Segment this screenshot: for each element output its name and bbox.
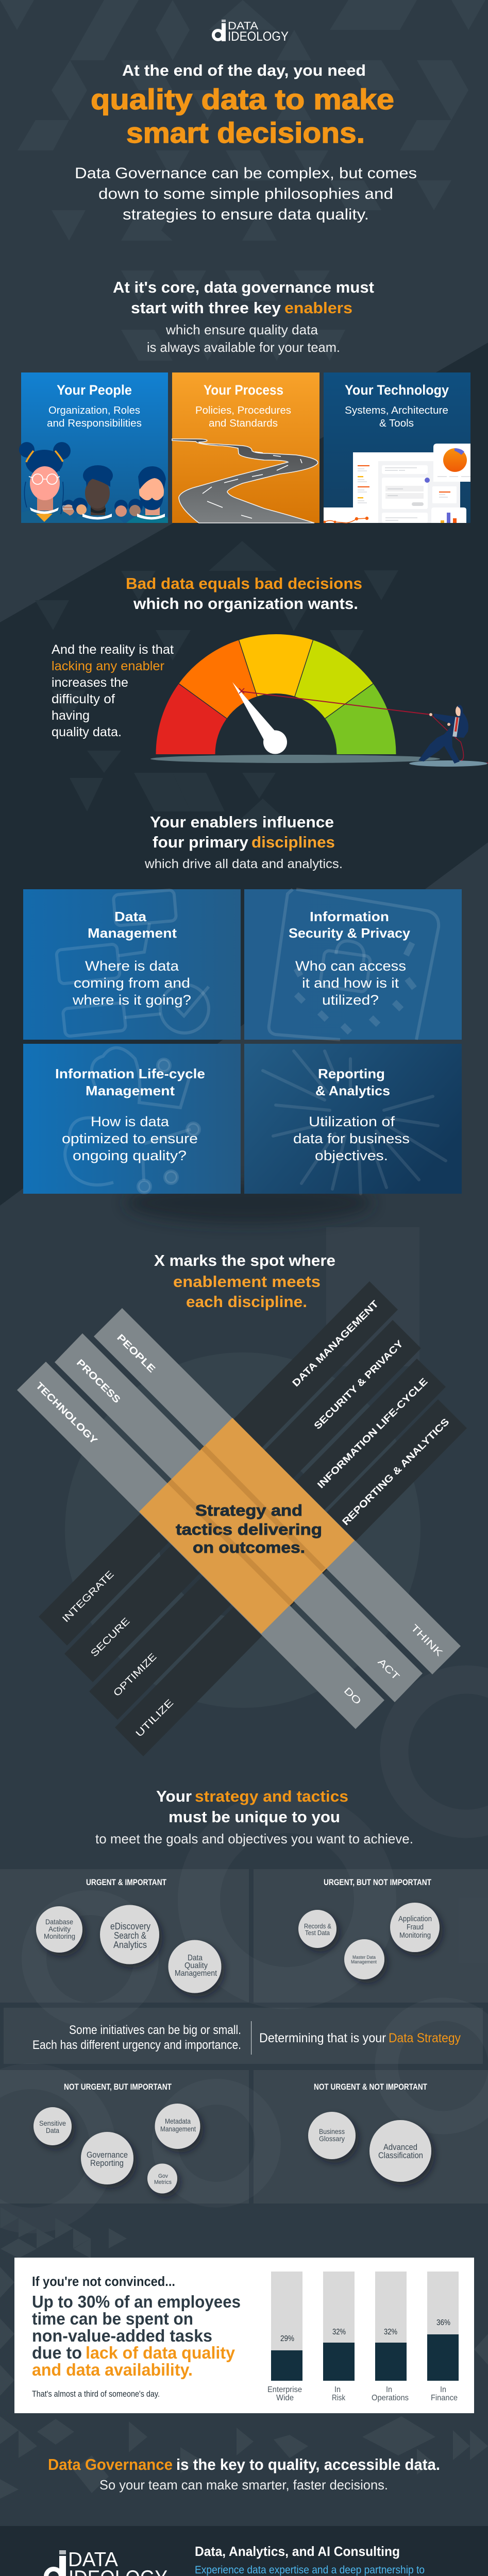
panel: reporting and analytics: Reporting	[318, 1066, 385, 1081]
bar chart: In	[386, 2385, 392, 2394]
text block: reality of lacking enablers: having	[52, 708, 90, 723]
label: enabler stripes: TECHNOLOGY	[33, 1380, 99, 1447]
heading: x marks the spot: X marks the spot where	[154, 1251, 335, 1269]
text block: reality of lacking enablers: increases the	[52, 675, 128, 690]
heading: three key enablers: which ensure quality data	[165, 322, 318, 337]
bubble: ediscovery search and analytics	[100, 1905, 159, 1964]
bubble: master data management: Management	[351, 1959, 377, 1965]
bubble: advanced classification: Classification	[378, 2150, 423, 2160]
panel: data management	[23, 889, 241, 1040]
background: faint rings behind the quadrants	[0, 1680, 488, 2221]
text block: statistic	[32, 2274, 241, 2399]
bubble: gov metrics: Gov	[158, 2173, 168, 2179]
logo: Data Ideology: IDEOLOGY	[228, 29, 289, 44]
panel: your process: and Standards	[209, 418, 278, 429]
bar chart: Operations	[372, 2394, 409, 2402]
label: enabler stripes	[33, 1332, 157, 1447]
bubble: application fraud monitoring: Monitoring	[399, 1931, 431, 1940]
bubble: data quality management: Management	[175, 1969, 217, 1978]
heading: four primary disciplines: Your enablers influence	[150, 813, 334, 831]
bubble: data quality management: Quality	[184, 1961, 208, 1970]
bubble: gov metrics	[147, 2164, 177, 2194]
label: action stripes: ACT	[376, 1656, 401, 1683]
text block: consulting: Data, Analytics, and AI Consulting	[195, 2544, 400, 2559]
bubble: ediscovery search and analytics: Search &	[114, 1930, 146, 1941]
panel: information security and privacy: Who can access	[295, 958, 406, 974]
panel: reporting and analytics: data for business	[293, 1131, 410, 1146]
label: enabler stripes: PEOPLE	[114, 1332, 157, 1375]
text block: consulting	[194, 2544, 451, 2576]
panel: information security and privacy: utilized?	[322, 992, 379, 1008]
label: action stripes: THINK	[409, 1622, 445, 1659]
bar chart: Wide	[276, 2394, 294, 2402]
panel: reporting and analytics: objectives.	[315, 1148, 388, 1163]
panel: data management: Management	[88, 925, 177, 941]
panel: your people: Your People	[57, 382, 132, 398]
label: discipline stripes: SECURITY & PRIVACY	[312, 1338, 406, 1432]
background: dark band triangles	[35, 541, 398, 829]
background: dark diagonal band	[0, 343, 488, 1206]
title: quality data to make	[91, 83, 394, 115]
intro paragraph: Data Governance can be complex, but comes	[75, 165, 417, 182]
closing statement: is the key to quality, accessible data.	[176, 2455, 440, 2473]
title: smart decisions.	[126, 116, 365, 149]
background: shadow below the discipline cards	[125, 1182, 373, 1224]
heading: strategy and tactics: must be unique to you	[169, 1808, 340, 1826]
chart: gauge	[150, 634, 488, 767]
closing statement: So your team can make smarter, faster decisions.	[99, 2477, 388, 2493]
text block: statistic: and data availability.	[32, 2360, 193, 2379]
bubble: governance reporting: Governance	[87, 2150, 128, 2160]
closing statement	[48, 2455, 440, 2493]
heading: strategy and tactics: to meet the goals and objectives you want to achieve.	[95, 1831, 413, 1846]
bubble: database activity monitoring: Activity	[48, 1925, 71, 1933]
heading: three key enablers: is always available for your team.	[147, 340, 340, 355]
panel: information life-cycle management	[23, 1044, 241, 1194]
intro paragraph	[75, 165, 417, 223]
text block: statistic: time can be spent on	[32, 2309, 193, 2328]
bubble: application fraud monitoring: Application	[398, 1914, 432, 1923]
band: disciplines and actions	[39, 1281, 467, 1756]
bar chart: Finance	[431, 2394, 458, 2402]
center text: tactics delivering	[176, 1520, 322, 1538]
text block: reality of lacking enablers: lacking any enabler	[52, 659, 164, 673]
panel: your technology: Your Technology	[345, 382, 449, 398]
intro paragraph: strategies to ensure data quality.	[123, 206, 369, 223]
bubble: sensitive data: Sensitive	[39, 2119, 66, 2127]
center text	[176, 1501, 322, 1556]
label: action stripes: INTEGRATE	[60, 1569, 116, 1624]
bar chart: 29%	[280, 2334, 294, 2343]
callout: data strategy: Each has different urgency and importance.	[32, 2038, 241, 2052]
panel: your technology: Systems, Architecture	[345, 405, 448, 416]
bubble: master data management: Master Data	[352, 1955, 376, 1960]
bubble: application fraud monitoring: Fraud	[407, 1923, 424, 1931]
bar chart: 36%	[436, 2318, 450, 2327]
bubble: data quality management: Data	[188, 1954, 203, 1962]
bubble: governance reporting: Reporting	[90, 2158, 124, 2168]
band: enablers	[17, 1308, 461, 1729]
panel: your technology	[324, 372, 470, 523]
text block: statistic: Up to 30% of an employees	[32, 2292, 241, 2311]
heading: four primary disciplines: disciplines	[251, 833, 335, 851]
text block: statistic: If you're not convinced...	[32, 2274, 175, 2289]
panel: data management: Data	[114, 909, 147, 924]
bubble: business glossary: Business	[319, 2127, 345, 2136]
panel: not urgent but important	[0, 2070, 249, 2204]
icon: rope	[239, 688, 488, 763]
heading: bad data: Bad data equals bad decisions	[126, 574, 362, 592]
bar chart: In	[440, 2385, 446, 2394]
center text: on outcomes.	[193, 1538, 305, 1556]
panel: your people	[19, 372, 168, 523]
text block: statistic: lack of data quality	[86, 2343, 235, 2362]
panel: not urgent but important: NOT URGENT, BUT IMPORTANT	[64, 2082, 172, 2092]
bubble: metadata management: Management	[160, 2125, 196, 2133]
bar chart: In	[334, 2385, 341, 2394]
bubble: sensitive data	[33, 2107, 72, 2145]
panel: your people: and Responsibilities	[47, 418, 142, 429]
bubble: governance reporting	[81, 2132, 133, 2184]
heading: four primary disciplines	[144, 813, 343, 871]
panel: urgent and important	[0, 1869, 249, 2003]
heading: three key enablers: At it's core, data governance must	[113, 278, 374, 296]
label: action stripes: DO	[342, 1685, 363, 1707]
panel: not urgent and not important	[254, 2070, 488, 2204]
panel: data management: where is it going?	[72, 992, 191, 1008]
heading: strategy and tactics	[95, 1787, 413, 1846]
panel: data management: Where is data	[85, 958, 179, 974]
heading: bad data: which no organization wants.	[133, 595, 358, 613]
heading: x marks the spot: each discipline.	[186, 1293, 307, 1311]
text block: statistic: non-value-added tasks	[32, 2326, 212, 2345]
panel: information life-cycle management: How is data	[91, 1114, 170, 1129]
heading: x marks the spot: enablement meets	[173, 1273, 321, 1291]
logo: Data Ideology: DATA	[228, 20, 258, 32]
bubble: database activity monitoring: Monitoring	[44, 1932, 75, 1940]
bar chart	[267, 2272, 459, 2402]
panel: footer	[0, 2526, 488, 2576]
panel: reporting and analytics: & Analytics	[315, 1083, 390, 1098]
text block: reality of lacking enablers: quality data.	[52, 725, 122, 739]
bubble: advanced classification: Advanced	[383, 2142, 417, 2152]
bubble: metadata management	[155, 2104, 200, 2149]
panel: your process: Your Process	[204, 382, 283, 398]
panel: information security and privacy	[244, 889, 462, 1040]
bubble: master data management	[344, 1939, 384, 1979]
bubble: application fraud monitoring	[390, 1903, 440, 1952]
heading: three key enablers	[113, 278, 374, 355]
heading: four primary disciplines: four primary	[153, 833, 249, 851]
icon: gauge needle	[232, 682, 287, 754]
icon: people illustration	[19, 442, 168, 523]
bubble: business glossary: Glossary	[319, 2134, 345, 2143]
icon: man pulling rope	[409, 705, 487, 767]
text block: consulting: Experience data expertise and a deep partnership to	[195, 2564, 425, 2576]
panel: your process: Policies, Procedures	[195, 405, 291, 416]
label: discipline stripes: REPORTING & ANALYTICS	[341, 1417, 451, 1528]
bubble: records and test data: Records &	[304, 1922, 331, 1930]
panel: information security and privacy: Security & Privacy	[289, 925, 411, 941]
bubble: sensitive data: Data	[46, 2126, 59, 2134]
icon: faint cloud network	[65, 1048, 199, 1193]
text block: statistic: That's almost a third of someone's day.	[32, 2389, 160, 2399]
panel: data management: coming from and	[74, 975, 190, 991]
panel: urgent and important: URGENT & IMPORTANT	[86, 1877, 166, 1887]
panel: urgent but not important	[254, 1869, 488, 2003]
bar chart: Risk	[332, 2394, 346, 2402]
text block: statistic: due to	[32, 2343, 82, 2362]
bubble: gov metrics: Metrics	[154, 2179, 172, 2185]
label: action stripes	[60, 1569, 445, 1739]
label: action stripes: UTILIZE	[134, 1698, 176, 1739]
intro paragraph: down to some simple philosophies and	[98, 185, 393, 202]
icon: faint workflow	[56, 890, 209, 1037]
bubble: metadata management: Metadata	[165, 2117, 191, 2125]
background: faint circle behind the X diagram	[65, 1227, 420, 1708]
heading: four primary disciplines: which drive all data and analytics.	[144, 857, 343, 871]
heading: strategy and tactics: Your	[156, 1787, 192, 1805]
panel: information life-cycle management: ongoing quality?	[73, 1148, 187, 1163]
icon: faint radiating lines	[263, 1051, 446, 1194]
title	[91, 61, 394, 149]
heading: strategy and tactics: strategy and tactics	[195, 1787, 348, 1805]
bubble: data quality management	[168, 1940, 222, 1993]
icon: winding road	[172, 439, 318, 523]
bar chart: 32%	[384, 2328, 397, 2336]
label: enabler stripes: PROCESS	[74, 1358, 122, 1405]
panel: not urgent and not important: NOT URGENT & NOT IMPORTANT	[314, 2082, 427, 2092]
background: hero triangle pattern	[0, 0, 485, 361]
panel: information security and privacy: Information	[310, 909, 389, 924]
panel: information life-cycle management: Management	[86, 1083, 175, 1098]
bubble: advanced classification	[369, 2120, 431, 2182]
panel: reporting and analytics	[244, 1044, 462, 1194]
center text: Strategy and	[195, 1501, 302, 1519]
center: orange intersection	[139, 1418, 355, 1634]
text block: reality of lacking enablers	[52, 642, 174, 739]
text block: reality of lacking enablers: And the reality is that	[52, 642, 174, 657]
panel: your process	[172, 372, 319, 523]
callout: data strategy: Data Strategy	[389, 2031, 461, 2045]
label: discipline stripes	[291, 1298, 451, 1528]
heading: three key enablers: start with three key	[131, 299, 281, 317]
logo: footer Data Ideology: DATA	[68, 2549, 118, 2571]
panel: information life-cycle management: optimized to ensure	[62, 1131, 198, 1146]
heading: three key enablers: enablers	[284, 299, 352, 317]
callout: data strategy	[4, 2008, 483, 2064]
closing statement: Data Governance	[48, 2455, 173, 2473]
bubble: database activity monitoring: Database	[45, 1918, 73, 1926]
callout: data strategy: Determining that is your	[259, 2031, 386, 2045]
label: discipline stripes: DATA MANAGEMENT	[291, 1298, 381, 1389]
panel: information security and privacy: it and how is it	[302, 975, 399, 991]
icon: faint lock and password	[269, 889, 439, 1040]
panel: your technology: & Tools	[379, 418, 414, 429]
panel: reporting and analytics: Utilization of	[309, 1114, 395, 1129]
panel: information life-cycle management: Information Life-cycle	[55, 1066, 205, 1081]
bubble: records and test data	[298, 1910, 336, 1948]
label: action stripes: SECURE	[89, 1616, 132, 1659]
bubble: ediscovery search and analytics: Analytics	[113, 1940, 147, 1950]
callout: data strategy: Some initiatives can be big or small.	[69, 2023, 241, 2037]
label: discipline stripes: INFORMATION LIFE-CYCLE	[315, 1376, 430, 1490]
logo: footer Data Ideology	[46, 2549, 167, 2576]
heading: bad data	[126, 574, 362, 613]
background: triangles near the stat card	[0, 2207, 488, 2499]
label: action stripes: OPTIMIZE	[111, 1651, 159, 1699]
panel: your people: Organization, Roles	[48, 405, 140, 416]
bubble: database activity monitoring	[36, 1906, 82, 1953]
heading: x marks the spot	[154, 1251, 335, 1311]
bubble: records and test data: Test Data	[305, 1929, 330, 1937]
panel: urgent but not important: URGENT, BUT NOT IMPORTANT	[324, 1877, 431, 1887]
title: At the end of the day, you need	[122, 61, 366, 79]
chart: x diagram	[17, 1281, 467, 1756]
logo: Data Ideology	[213, 20, 289, 44]
bubble: business glossary	[308, 2112, 356, 2159]
panel: statistic card	[14, 2258, 474, 2413]
bar chart: 32%	[332, 2328, 346, 2336]
icon: software dashboard	[324, 444, 470, 523]
text block: reality of lacking enablers: difficulty of	[52, 692, 115, 706]
bar chart: Enterprise	[267, 2385, 302, 2394]
bubble: ediscovery search and analytics: eDiscovery	[110, 1921, 150, 1931]
